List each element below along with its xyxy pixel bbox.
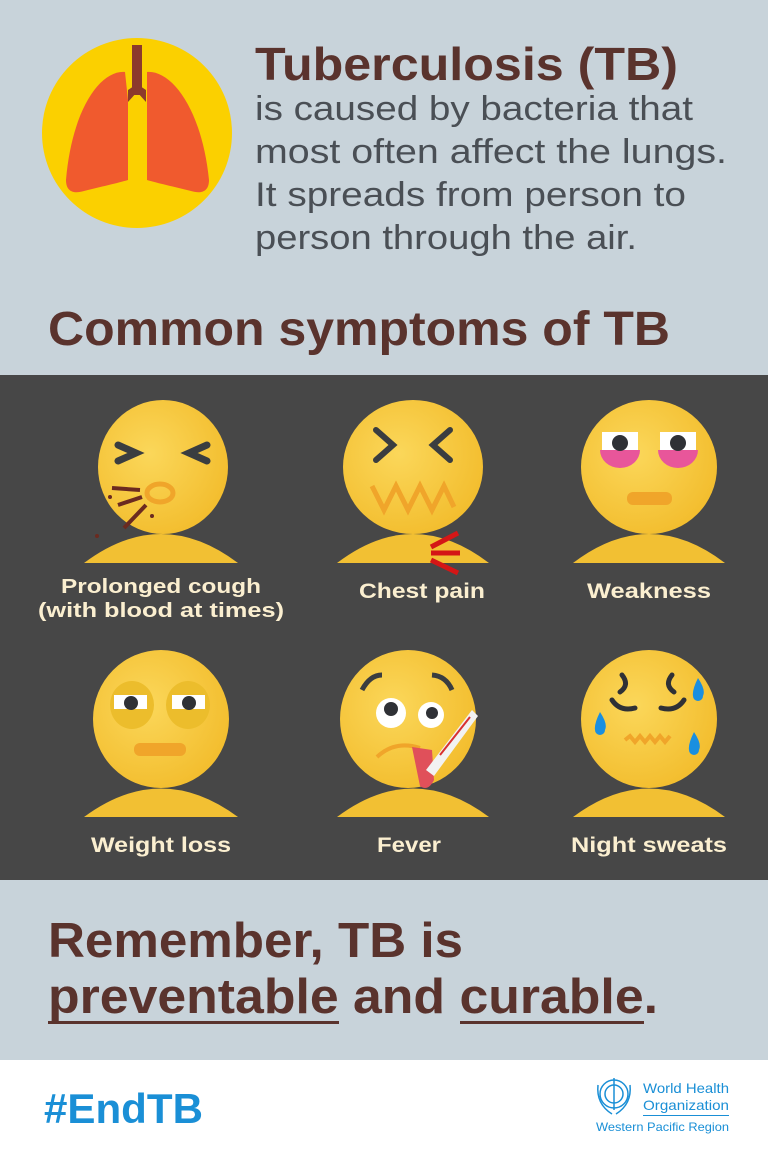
logo: WHO: Organization [643, 1097, 729, 1113]
text block: intro [255, 90, 727, 257]
logo: WHO: World Health [643, 1080, 729, 1096]
logo: WHO [596, 1078, 729, 1134]
symptom: fever [337, 650, 489, 857]
symptom: fever: Fever [377, 834, 441, 857]
background: bottom section [0, 880, 768, 1060]
text block: intro: It spreads from person to [255, 176, 686, 214]
background: top section [0, 0, 768, 375]
symptom: night sweats [571, 650, 727, 857]
symptom: weakness: Weakness [587, 580, 711, 603]
symptom: prolonged cough [38, 400, 284, 622]
text block: intro: most often affect the lungs. [255, 133, 727, 171]
text block: remember: Remember, TB is [48, 914, 463, 968]
title: Tuberculosis (TB) [255, 38, 678, 90]
symptom: weight loss: Weight loss [91, 834, 231, 857]
symptom: weakness [573, 400, 725, 603]
panel: symptoms [0, 375, 768, 880]
symptom: prolonged cough: Prolonged cough [61, 576, 261, 598]
symptom: chest pain [337, 400, 489, 603]
text block: intro: is caused by bacteria that [255, 90, 694, 128]
heading: common symptoms: Common symptoms of TB [48, 303, 670, 356]
text block: remember [48, 914, 658, 1024]
symptom: weight loss [84, 650, 238, 857]
icon: lungs [42, 38, 232, 228]
text block: intro: person through the air. [255, 219, 637, 257]
logo: WHO: Western Pacific Region [596, 1120, 729, 1134]
symptom: night sweats: Night sweats [571, 834, 727, 857]
symptom: prolonged cough: (with blood at times) [38, 600, 284, 622]
hashtag: #EndTB [44, 1085, 203, 1132]
text block: remember: preventable and curable. [48, 970, 658, 1024]
symptom: chest pain: Chest pain [359, 580, 485, 603]
